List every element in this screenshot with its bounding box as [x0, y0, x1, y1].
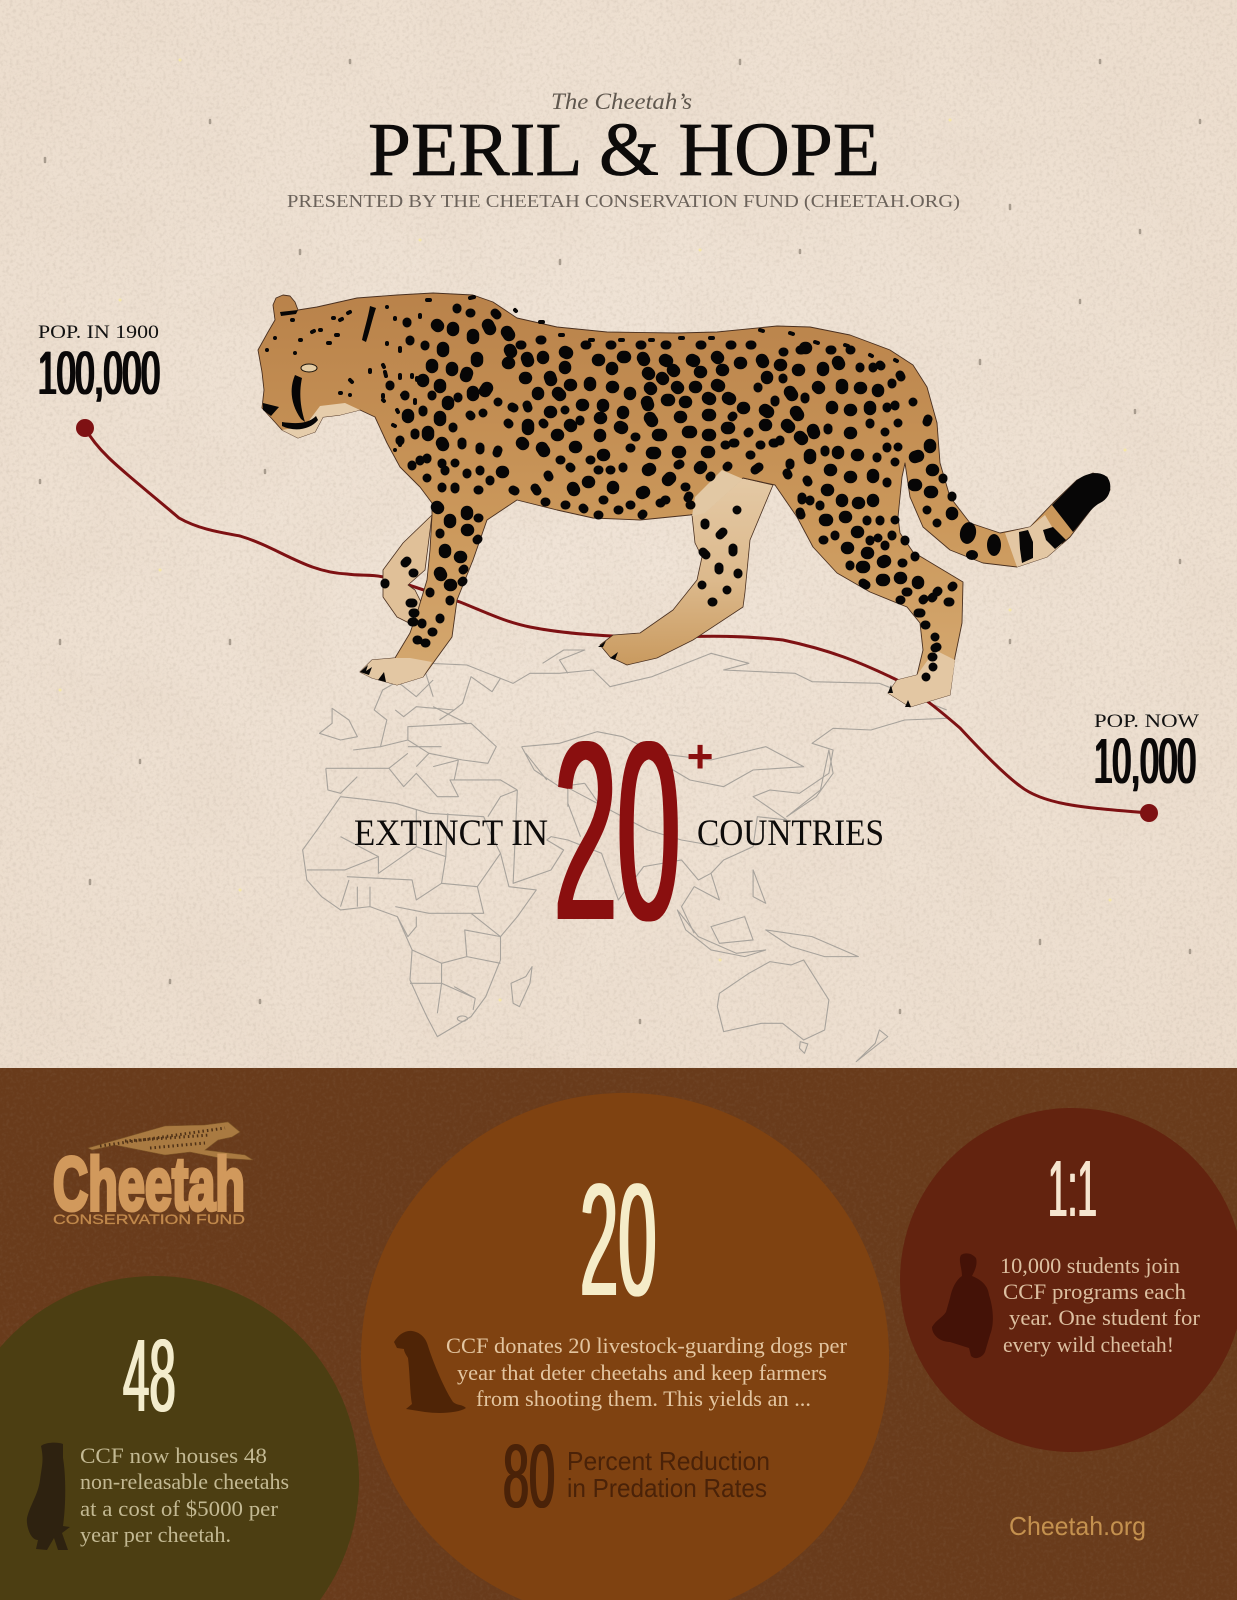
- text: housing description: at a cost of $5000 per: [80, 1496, 279, 1521]
- map: Africa: [303, 797, 536, 1037]
- population decline line: [76, 419, 1158, 822]
- body, head, near legs and tail: [258, 293, 1110, 707]
- logo: running cheetah: [88, 1122, 253, 1160]
- text: student description: year. One student for: [1009, 1305, 1201, 1330]
- text: dogs description: from shooting them. This yields an ...: [476, 1386, 811, 1411]
- number: 48 cheetahs: 48: [123, 1318, 176, 1433]
- number: 100,000 population in 1900: 100,000: [38, 339, 160, 407]
- logo: wordmark: Cheetah: [53, 1142, 245, 1226]
- text: dogs description: [446, 1333, 848, 1411]
- text: dogs description: year that deter cheetahs and keep farmers: [457, 1360, 827, 1385]
- label: population in 1900: POP. IN 1900: [38, 322, 159, 343]
- start dot: [76, 419, 94, 437]
- title: Peril and Hope: PERIL & HOPE: [368, 108, 880, 192]
- number: 80 percent: 80: [503, 1427, 555, 1527]
- icon: sitting cheetah: [27, 1443, 70, 1550]
- panel: green circle, housed cheetahs: [0, 1276, 359, 1600]
- title: The Cheetah's: The Cheetah’s: [551, 89, 692, 114]
- panel: cheetah logo: [53, 1122, 253, 1227]
- panel: center circle, guarding dogs: [361, 1093, 889, 1600]
- text: student description: 10,000 students join: [1000, 1253, 1180, 1278]
- spots: large: [408, 325, 952, 585]
- icon: dog: [394, 1331, 466, 1413]
- world map outline: [303, 650, 947, 1062]
- face marks: [263, 306, 376, 429]
- map: Europe: [319, 663, 517, 797]
- light muzzle: [282, 403, 360, 438]
- claws: [360, 641, 911, 707]
- paper background: [0, 0, 1237, 1070]
- subtitle: PRESENTED BY THE CHEETAH CONSERVATION FUND (CHEETAH.ORG): [287, 191, 960, 212]
- map: Australia and New Zealand: [717, 960, 888, 1062]
- label: countries: COUNTRIES: [697, 813, 884, 854]
- bottom brown band: [0, 1068, 1237, 1600]
- eye: [301, 364, 317, 372]
- label: population now: POP. NOW: [1094, 711, 1199, 732]
- text: housing description: CCF now houses 48: [80, 1443, 267, 1468]
- logo: conservation fund: CONSERVATION FUND: [53, 1211, 245, 1227]
- far foreleg: [383, 515, 432, 627]
- text: dogs description: CCF donates 20 livestock-guarding dogs per: [446, 1333, 848, 1358]
- tail bands: [958, 521, 1066, 563]
- text: student description: CCF programs each: [1003, 1279, 1186, 1304]
- spots: medium: [385, 308, 953, 677]
- number: 10,000 population now: 10,000: [1094, 725, 1196, 797]
- text: predation reduction: [567, 1446, 770, 1503]
- plus sign: +: [687, 730, 713, 782]
- text: student description: every wild cheetah!: [1003, 1332, 1174, 1357]
- text: housing description: [80, 1443, 289, 1547]
- number: 1:1 ratio: 1:1: [1048, 1144, 1097, 1233]
- light belly patch: [692, 470, 743, 516]
- number: 20 extinct countries: 20: [554, 689, 680, 974]
- panel: red circle, students: [900, 1108, 1237, 1452]
- number: 20 dogs: 20: [580, 1150, 657, 1329]
- far hind leg: [600, 478, 773, 665]
- website link text: Cheetah.org: [1009, 1511, 1146, 1541]
- spots: small: [267, 297, 897, 450]
- text: housing description: year per cheetah.: [80, 1522, 231, 1547]
- text: housing description: non-releasable cheetahs: [80, 1469, 289, 1494]
- tail tip: [1052, 473, 1110, 532]
- icon: crouching student: [932, 1253, 993, 1358]
- text: student description: [1000, 1253, 1201, 1357]
- end dot: [1140, 804, 1158, 822]
- text: predation reduction: Percent Reduction: [567, 1446, 770, 1476]
- illustration: cheetah: [258, 293, 1110, 707]
- label: extinct in: EXTINCT IN: [354, 813, 548, 854]
- text: predation reduction: in Predation Rates: [567, 1473, 767, 1503]
- map: Asia: [488, 650, 947, 957]
- light paws and tail band: [360, 515, 1062, 707]
